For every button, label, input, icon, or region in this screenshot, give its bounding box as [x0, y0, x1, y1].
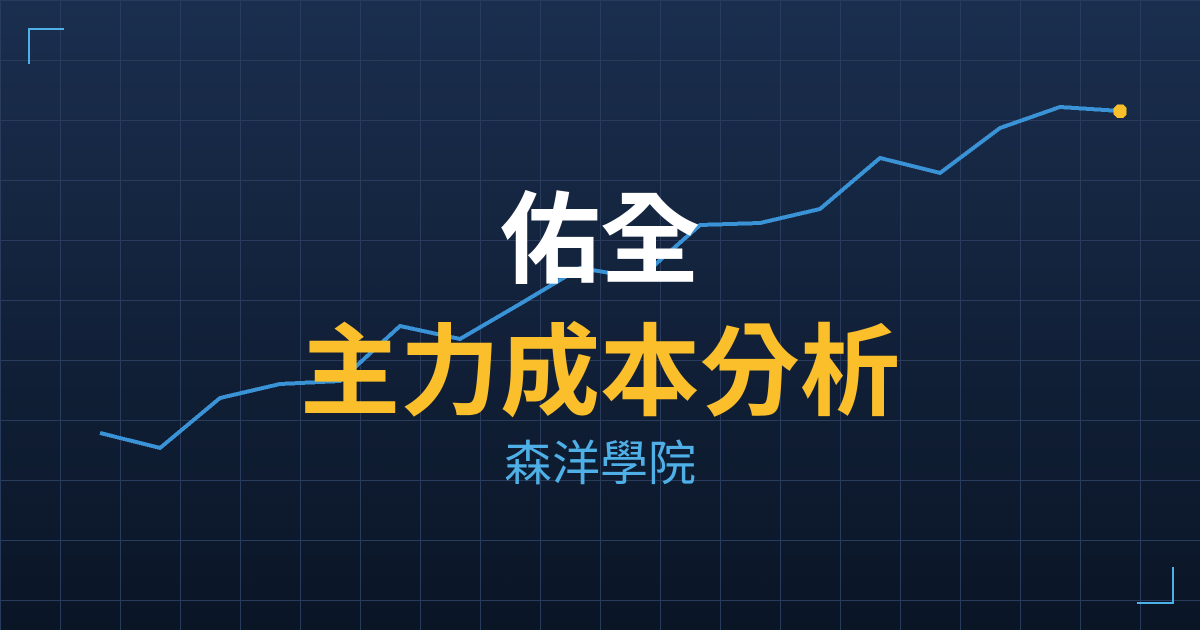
line chart: rising price trend	[100, 107, 1120, 448]
chart end point marker	[1114, 104, 1126, 118]
corner bracket: bottom right	[1137, 567, 1173, 603]
corner bracket: top left	[29, 29, 64, 64]
title: main cost analysis: 主力成本分析	[300, 317, 900, 429]
title: stock name: 佑全	[500, 185, 700, 297]
subtitle: academy name: 森洋學院	[504, 438, 696, 491]
